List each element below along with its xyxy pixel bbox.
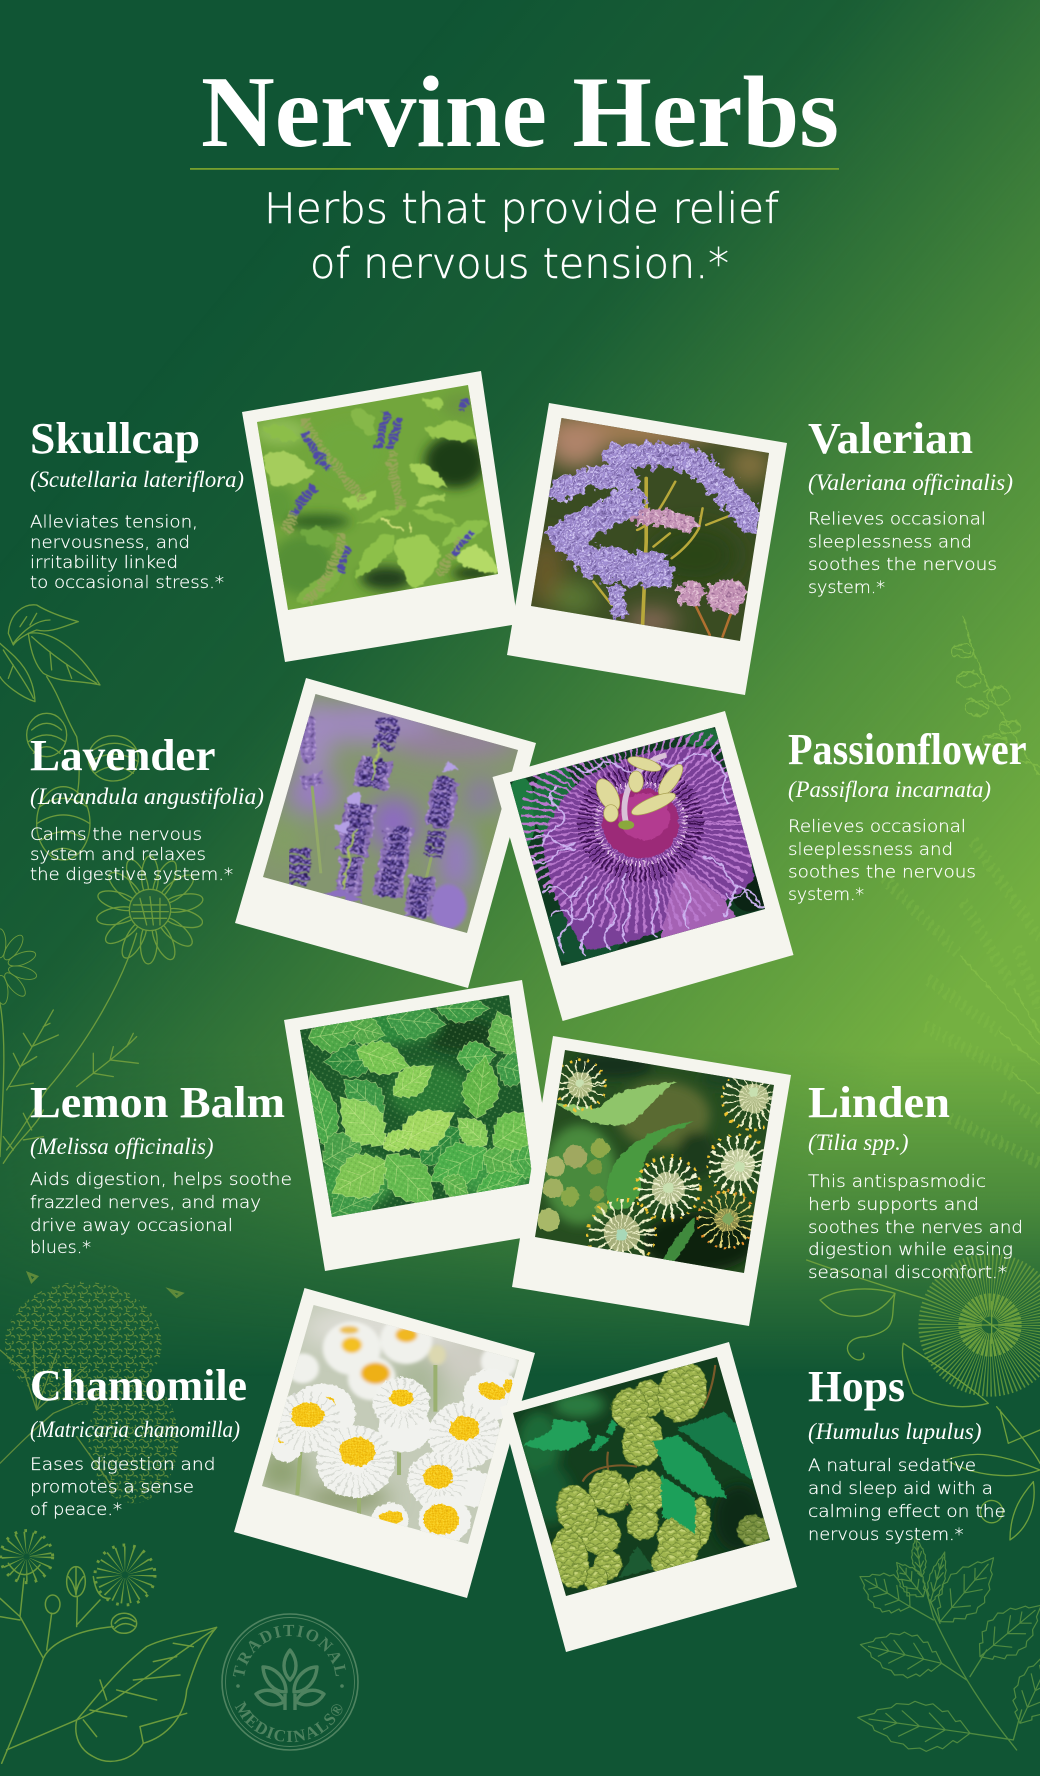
description: Linden: This antispasmodic (808, 1172, 986, 1192)
photo: passionflower (510, 727, 765, 966)
heading: Valerian: Valerian (808, 414, 973, 463)
subtitle: Herbs that provide relief (264, 184, 779, 233)
description: Skullcap: nervousness, and (30, 533, 190, 553)
latin name: Scutellaria lateriflora: (Scutellaria lateriflora) (30, 467, 244, 493)
logo: Traditional Medicinals: TRADITIONAL (232, 1624, 346, 1676)
latin name: Passiflora incarnata: (Passiflora incarnata) (788, 777, 991, 803)
polaroid: passionflower (492, 711, 794, 1021)
description: Skullcap (30, 512, 224, 593)
logo: Traditional Medicinals (221, 1613, 359, 1751)
polaroid: hops (499, 1342, 797, 1652)
label: Linden (808, 1078, 1023, 1283)
description: Linden: soothes the nerves and (808, 1218, 1023, 1238)
label: Skullcap (30, 414, 244, 593)
description: Chamomile: Eases digestion and (30, 1455, 216, 1475)
label: Passionflower (788, 725, 1026, 905)
heading: Hops: Hops (808, 1362, 905, 1411)
latin name: Humulus lupulus: (Humulus lupulus) (808, 1419, 982, 1445)
photo: valerian (531, 418, 769, 641)
description: Passionflower: system.* (788, 885, 864, 905)
description: Lemon Balm (30, 1170, 292, 1258)
description: Passionflower: Relieves occasional (788, 817, 966, 837)
photo: lavender (263, 694, 518, 933)
botanical line art: mint leaves, bottom right (850, 1536, 1040, 1757)
label: Lemon Balm (30, 1078, 292, 1258)
description: Passionflower: sleeplessness and (788, 840, 953, 860)
label: Lavender (30, 731, 264, 885)
description: Valerian (808, 510, 997, 598)
description: Valerian: Relieves occasional (808, 510, 986, 530)
description: Linden (808, 1172, 1023, 1283)
photo: chamomile (262, 1305, 519, 1544)
description: Lemon Balm: drive away occasional (30, 1216, 233, 1236)
heading: Lavender: Lavender (30, 731, 216, 780)
heading: Chamomile: Chamomile (30, 1361, 247, 1410)
description: Chamomile (30, 1455, 216, 1520)
description: Linden: digestion while easing (808, 1240, 1013, 1260)
description: Valerian: system.* (808, 578, 885, 598)
description: Hops (808, 1456, 1006, 1545)
polaroid: valerian (507, 403, 787, 695)
description: Valerian: sleeplessness and (808, 532, 972, 552)
latin name: Valeriana officinalis: (Valeriana officinalis) (808, 470, 1013, 496)
description: Lavender: system and relaxes (30, 845, 206, 865)
subtitle (264, 184, 779, 288)
description: Chamomile: of peace.* (30, 1500, 122, 1520)
latin name: Tilia spp.: (Tilia spp.) (808, 1130, 909, 1156)
description: Passionflower: soothes the nervous (788, 862, 976, 882)
latin name: Matricaria chamomilla: (Matricaria chamomilla) (30, 1417, 240, 1443)
polaroid: linden (512, 1036, 791, 1326)
description: Hops: A natural sedative (808, 1456, 976, 1476)
botanical line art: queen anne's lace, left (0, 1273, 182, 1503)
background gradient (0, 0, 1040, 1346)
botanical line art: passionflower, right (807, 1260, 1040, 1540)
description: Passionflower (788, 817, 976, 905)
photo: skullcap (257, 385, 498, 610)
botanical line art: hop vine and daisies, left (0, 605, 205, 1163)
description: Skullcap: Alleviates tension, (30, 512, 198, 532)
description: Lavender (30, 825, 233, 885)
polaroid: lemon balm (284, 980, 563, 1271)
label: Hops (808, 1362, 1006, 1545)
title underline (190, 168, 839, 170)
description: Hops: calming effect on the (808, 1502, 1006, 1522)
subtitle: of nervous tension.* (310, 239, 729, 288)
polaroid: skullcap (241, 371, 518, 662)
description: Linden: seasonal discomfort.* (808, 1263, 1007, 1283)
description: Lavender: Calms the nervous (30, 825, 202, 845)
description: Hops: nervous system.* (808, 1525, 964, 1545)
latin name: Melissa officinalis: (Melissa officinalis) (30, 1134, 214, 1160)
description: Hops: and sleep aid with a (808, 1479, 993, 1499)
photo: lemon balm (300, 995, 532, 1217)
description: Lemon Balm: blues.* (30, 1238, 91, 1258)
heading: Skullcap: Skullcap (30, 414, 200, 463)
description: Lemon Balm: frazzled nerves, and may (30, 1193, 261, 1213)
heading: Linden: Linden (808, 1078, 950, 1127)
label: Valerian (808, 414, 1013, 598)
botanical line art: linden branch and leaf, bottom left (0, 1531, 217, 1763)
title: Nervine Herbs (201, 56, 839, 169)
polaroid: lavender (235, 678, 536, 988)
heading: Lemon Balm: Lemon Balm (30, 1078, 285, 1127)
description: Chamomile: promotes a sense (30, 1478, 194, 1498)
logo: Traditional Medicinals: MEDICINALS® (234, 1700, 342, 1742)
polaroid: chamomile (234, 1288, 535, 1598)
description: Valerian: soothes the nervous (808, 555, 997, 575)
description: Skullcap: irritability linked (30, 553, 178, 573)
description: Lavender: the digestive system.* (30, 865, 233, 885)
photo: hops (513, 1357, 770, 1596)
botanical line art: sprig and lavender, right (883, 616, 1040, 1163)
description: Lemon Balm: Aids digestion, helps soothe (30, 1170, 292, 1190)
description: Linden: herb supports and (808, 1195, 979, 1215)
photo: linden (535, 1050, 774, 1273)
description: Skullcap: to occasional stress.* (30, 573, 224, 593)
latin name: Lavandula angustifolia: (Lavandula angustifolia) (30, 784, 264, 810)
label: Chamomile (30, 1361, 247, 1520)
